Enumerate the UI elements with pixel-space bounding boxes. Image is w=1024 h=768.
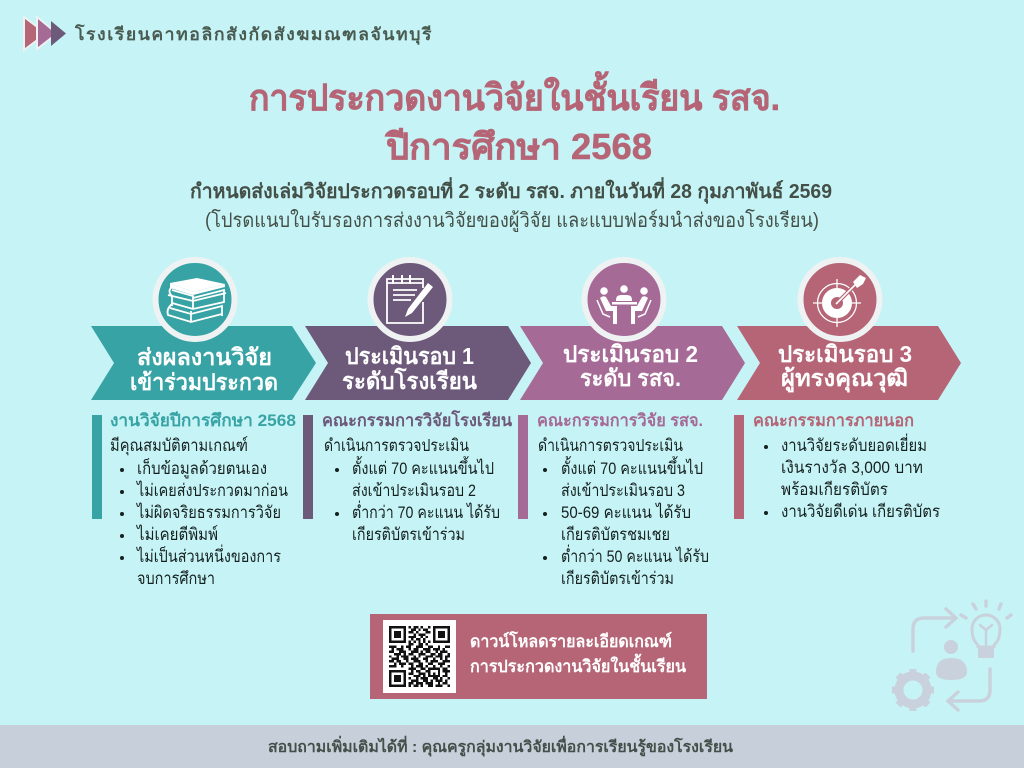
panel: RSJ committee: เกียรติบัตรเข้าร่วม — [561, 569, 674, 588]
step 3 chevron — [520, 326, 745, 400]
footer bar: สอบถามเพิ่มเติมได้ที่ : คุณครูกลุ่มงานวิจัยเพื่อการเรียนรู้ของโรงเรียน — [268, 735, 733, 758]
icon: meeting table — [584, 260, 664, 339]
step 2 chevron: ระดับโรงเรียน — [342, 367, 477, 394]
step 4 chevron: ผู้ทรงคุณวุฒิ — [781, 365, 908, 393]
step 2 chevron: ประเมินรอบ 1 — [345, 343, 474, 369]
panel: research entry criteria: ไม่เคยส่งประกวดมาก่อน — [135, 480, 288, 500]
panel: school committee: ต่ำกว่า 70 คะแนน ได้รับ — [352, 500, 500, 522]
title — [249, 71, 780, 167]
panel: QR download — [370, 614, 707, 699]
panel: external committee: งานวิจัยดีเด่น เกียรติบัตร — [781, 502, 940, 521]
panel: research entry criteria: ไม่ผิดจริยธรรมการวิจัย — [135, 502, 281, 522]
panel: school committee: ส่งเข้าประเมินรอบ 2 — [352, 481, 476, 500]
step 4 chevron — [737, 326, 961, 400]
panel: research entry criteria: จบการศึกษา — [137, 569, 215, 588]
step 3 chevron: ระดับ รสจ. — [580, 365, 681, 391]
panel: school committee: ตั้งแต่ 70 คะแนนขึ้นไป — [352, 456, 494, 478]
panel: research entry criteria: งานวิจัยปีการศึกษา 2568 — [110, 410, 296, 430]
panel: research entry criteria — [92, 410, 296, 588]
panel: RSJ committee — [518, 411, 709, 588]
panel: external committee — [734, 411, 940, 521]
step 3 chevron: ประเมินรอบ 2 — [563, 341, 698, 367]
title: ปีการศึกษา 2568 — [384, 126, 652, 167]
panel: school committee: คณะกรรมการวิจัยโรงเรียน — [322, 410, 512, 430]
deadline subtitle: กำหนดส่งเล่มวิจัยประกวดรอบที่ 2 ระดับ รสจ. ภายในวันที่ 28 กุมภาพันธ์ 2569 — [190, 176, 832, 204]
title: การประกวดงานวิจัยในชั้นเรียน รสจ. — [249, 71, 780, 118]
step 1 chevron: เข้าร่วมประกวด — [130, 369, 278, 395]
school name: โรงเรียนคาทอลิกสังกัดสังฆมณฑลจันทบุรี — [74, 24, 433, 45]
panel: QR download: ดาวน์โหลดรายละเอียดเกณฑ์ — [470, 631, 672, 651]
panel: external committee: คณะกรรมการภายนอก — [753, 411, 914, 430]
panel: research entry criteria: ไม่เป็นส่วนหนึ่งของการ — [135, 544, 281, 566]
panel: external committee: เงินรางวัล 3,000 บาท — [781, 458, 923, 477]
panel: RSJ committee: ดำเนินการตรวจประเมิน — [538, 436, 683, 455]
icon: innovation cycle — [892, 601, 1011, 711]
step 1 chevron: ส่งผลงานวิจัย — [137, 344, 272, 370]
QR code — [383, 620, 456, 693]
panel: RSJ committee: 50-69 คะแนน ได้รับ — [561, 502, 691, 522]
panel: external committee: งานวิจัยระดับยอดเยี่ยม — [781, 433, 927, 455]
panel: school committee: เกียรติบัตรเข้าร่วม — [352, 525, 465, 544]
step 1 chevron — [91, 326, 316, 400]
panel: RSJ committee: เกียรติบัตรชมเชย — [561, 525, 670, 544]
panel: research entry criteria: มีคุณสมบัติตามเกณฑ์ — [110, 436, 248, 456]
attachment note: (โปรดแนบใบรับรองการส่งงานวิจัยของผู้วิจัย และแบบฟอร์มนำส่งของโรงเรียน) — [205, 209, 819, 233]
step 4 chevron: ประเมินรอบ 3 — [778, 341, 912, 367]
icon: notepad and pen — [370, 260, 450, 339]
panel: RSJ committee: ส่งเข้าประเมินรอบ 3 — [561, 481, 685, 500]
panel: external committee: พร้อมเกียรติบัตร — [781, 480, 888, 499]
panel: RSJ committee: คณะกรรมการวิจัย รสจ. — [537, 411, 703, 430]
panel: RSJ committee: ต่ำกว่า 50 คะแนน ได้รับ — [561, 544, 709, 566]
icon: books — [156, 260, 234, 339]
panel: school committee: ดำเนินการตรวจประเมิน — [324, 436, 469, 455]
panel: RSJ committee: ตั้งแต่ 70 คะแนนขึ้นไป — [561, 456, 703, 478]
panel: school committee — [303, 410, 512, 544]
panel: research entry criteria: ไม่เคยตีพิมพ์ — [135, 524, 218, 544]
logo: triple arrows — [24, 17, 66, 50]
icon: target with arrow — [800, 260, 880, 339]
panel: QR download: การประกวดงานวิจัยในชั้นเรียน — [470, 653, 686, 676]
footer bar — [0, 725, 1024, 768]
panel: research entry criteria: เก็บข้อมูลด้วยตนเอง — [137, 457, 267, 479]
step 2 chevron — [305, 326, 531, 400]
